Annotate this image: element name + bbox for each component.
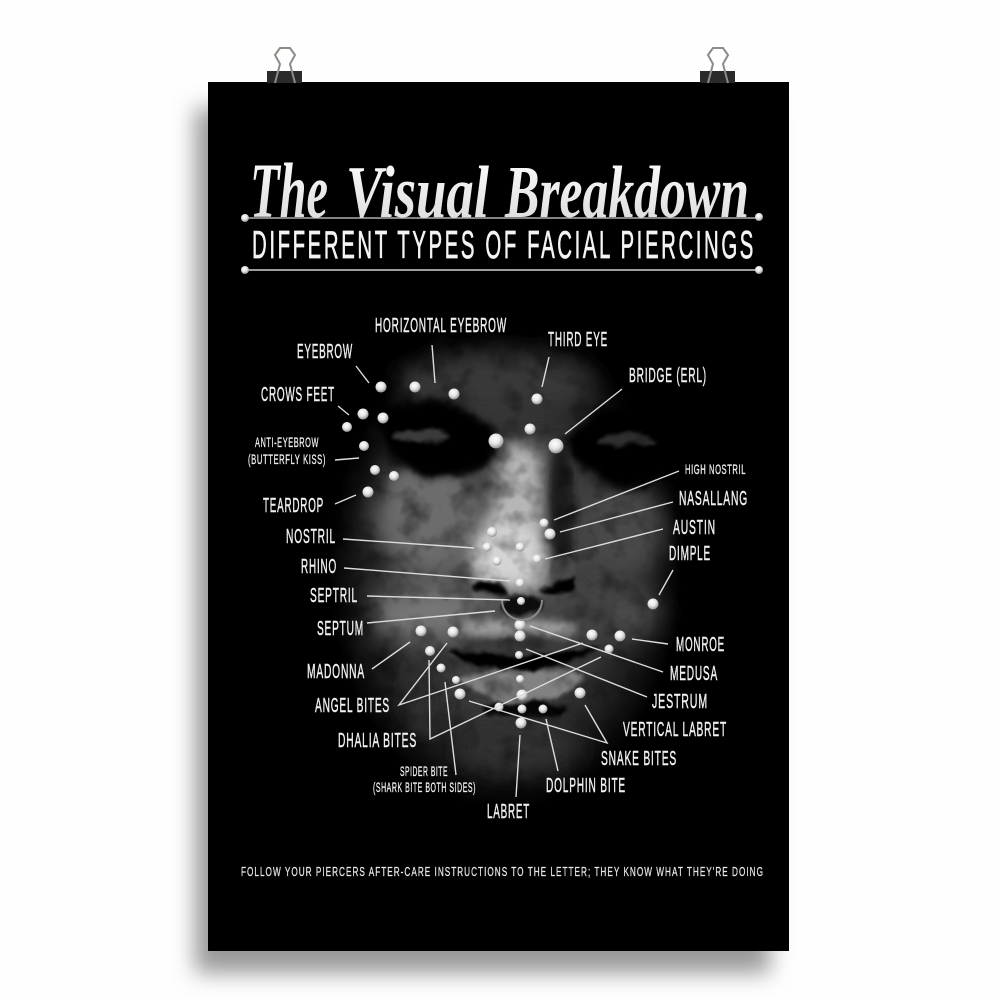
poster background: [208, 82, 789, 951]
piercing labels and leader lines: THIRD EYE: [548, 329, 608, 351]
label: angel bites: ANGEL BITES: [315, 695, 390, 717]
label: dimple: [659, 543, 711, 595]
icon: right binder clip: [700, 48, 735, 83]
label: medusa: MEDUSA: [670, 663, 718, 685]
label: high nostril: HIGH NOSTRIL: [685, 461, 746, 477]
poster shadow: [195, 108, 770, 973]
label: austin: [545, 517, 716, 559]
label: high nostril: [554, 461, 746, 520]
label: nostril: NOSTRIL: [286, 526, 336, 548]
piercing labels and leader lines: MONROE: [676, 634, 725, 656]
label: spider bite: SPIDER BITE: [400, 763, 448, 779]
label: dhalia bites: [338, 657, 601, 752]
septum ring: [502, 600, 542, 620]
piercing studs: [342, 382, 658, 728]
piercing labels and leader lines: (SHARK BITE BOTH SIDES): [373, 779, 476, 795]
label: septril: SEPTRIL: [310, 585, 358, 607]
label: snake bites: SNAKE BITES: [601, 748, 677, 770]
label: jestrum: JESTRUM: [652, 691, 708, 713]
title: Visual: [346, 152, 489, 234]
label: angel bites: [315, 643, 583, 717]
label: snake bites: [469, 701, 677, 770]
label: medusa: [530, 626, 718, 685]
label: dhalia bites: DHALIA BITES: [338, 730, 417, 752]
label: nostril: [286, 526, 474, 548]
label: teardrop: TEARDROP: [263, 495, 324, 517]
label: horizontal eyebrow: [375, 315, 507, 383]
label: vertical labret: VERTICAL LABRET: [623, 719, 727, 741]
label: crows feet: [261, 384, 349, 415]
label: monroe: [632, 634, 725, 656]
label: horizontal eyebrow: HORIZONTAL EYEBROW: [375, 315, 507, 337]
icon: left binder clip: [267, 48, 302, 83]
label: madonna: MADONNA: [307, 661, 365, 683]
title: The: [250, 147, 328, 234]
title rule with studs: [241, 213, 763, 222]
label: labret: [487, 735, 530, 823]
title: Breakdown: [504, 152, 749, 234]
label: third eye: [542, 329, 608, 387]
label: anti-eyebrow: ANTI-EYEBROW: [255, 434, 319, 450]
piercing labels and leader lines: LABRET: [487, 801, 530, 823]
label: eyebrow: EYEBROW: [297, 341, 353, 363]
label: bridge: BRIDGE (ERL): [629, 365, 707, 387]
label: septril: [310, 585, 510, 607]
label: anti-eyebrow: (BUTTERFLY KISS): [248, 451, 326, 467]
label: anti-eyebrow: [248, 434, 359, 467]
label: rhino: [301, 556, 510, 581]
subtitle rule with studs: [241, 266, 763, 274]
label: dolphin bite: DOLPHIN BITE: [546, 775, 626, 797]
label: jestrum: [526, 649, 708, 713]
face portrait: [280, 280, 730, 870]
label: nasallang: [560, 488, 748, 532]
label: septum: [317, 611, 495, 640]
title: [250, 147, 749, 234]
piercing labels and leader lines: [248, 315, 748, 823]
label: nasallang: NASALLANG: [679, 488, 748, 510]
label: bridge: [565, 365, 707, 434]
label: madonna: [307, 642, 410, 683]
label: septum: SEPTUM: [317, 618, 364, 640]
label: eyebrow: [297, 341, 369, 383]
label: crows feet: CROWS FEET: [261, 384, 335, 406]
label: rhino: RHINO: [301, 556, 337, 578]
label: spider bite: [373, 682, 476, 795]
label: dolphin bite: [546, 719, 626, 797]
piercing labels and leader lines: DIMPLE: [669, 543, 711, 565]
label: austin: AUSTIN: [673, 517, 716, 539]
